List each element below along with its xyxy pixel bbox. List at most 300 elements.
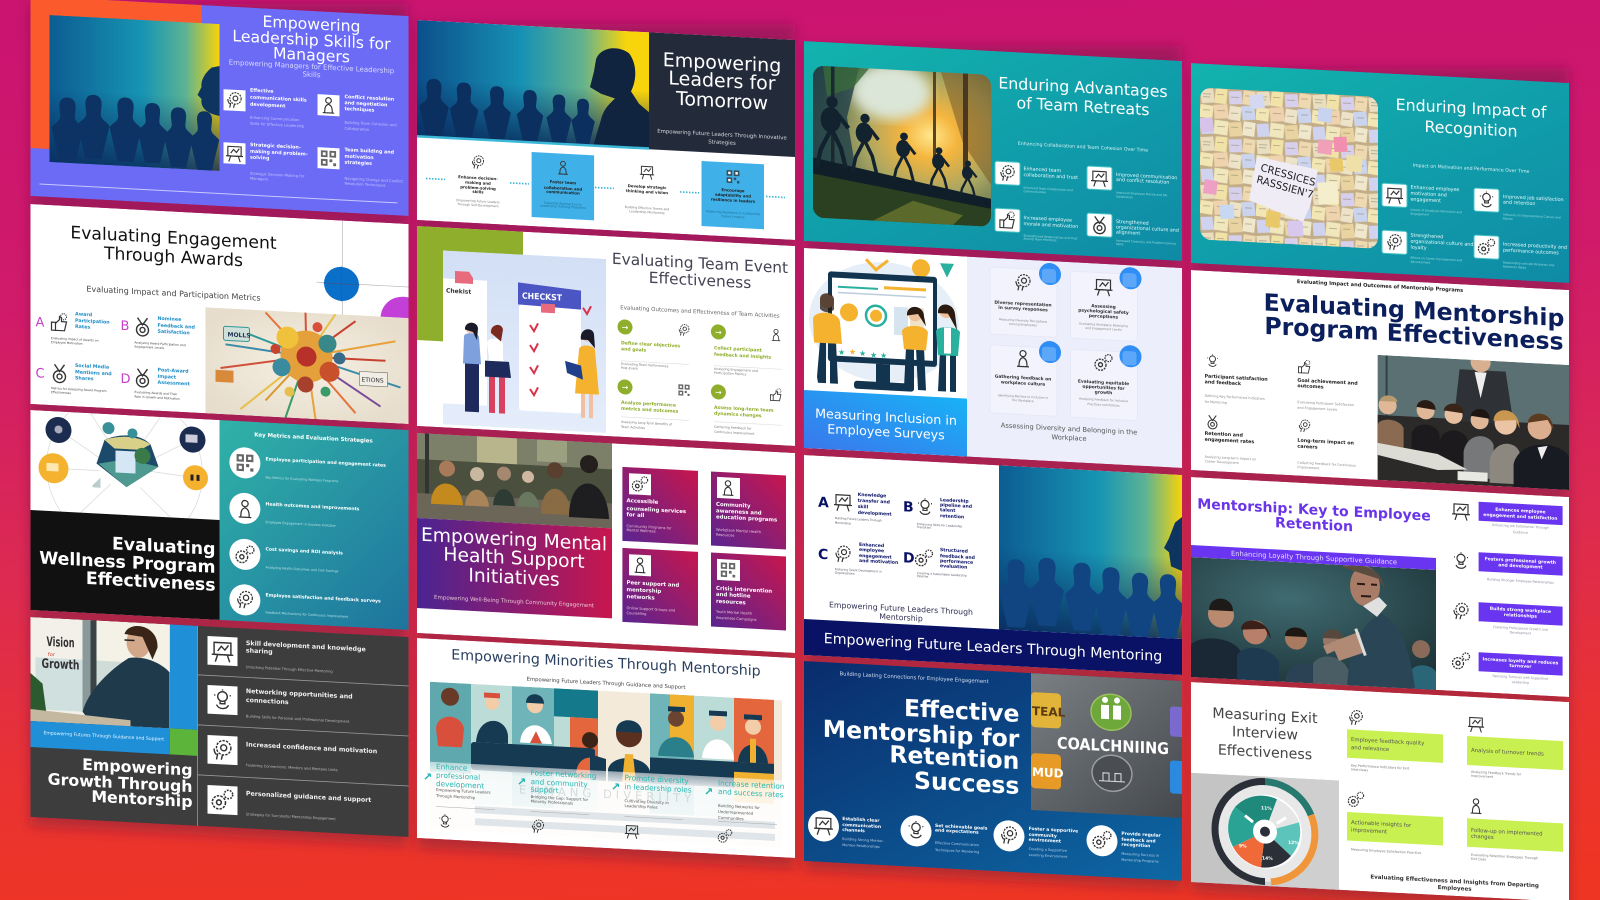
black title panel: Evaluating	[112, 534, 216, 560]
feature grid	[618, 319, 782, 437]
service cards: Awareness Campaigns	[716, 616, 757, 622]
feature grid: motivation	[344, 154, 374, 161]
illustration: diverse leaders	[430, 682, 782, 847]
awards metrics A B C D: Metrics for Assessing Award Program	[51, 386, 107, 393]
subtitle: Empowering Managers for Effective Leadership	[229, 58, 395, 75]
benefit list: Increases loyalty and reduces	[1483, 656, 1559, 666]
service cards: Crisis intervention	[716, 586, 772, 595]
feature grid: and retention	[1503, 200, 1535, 207]
action circles: recognition	[1121, 842, 1150, 849]
feature grid: Strengthened	[1116, 219, 1149, 227]
process cards: Develop strategic	[628, 183, 667, 190]
glass cards: Assessing	[1091, 303, 1116, 310]
feature grid: Define clear objectives	[621, 340, 680, 349]
feature grid: →	[715, 388, 722, 397]
feature grid: Retention Rates	[1503, 265, 1526, 270]
feedback cards: changes	[1471, 834, 1494, 841]
photo: sticky note wall: RASSSIEN'7	[1255, 174, 1315, 201]
teal metrics panel: Analyzing Health Outcomes and Cost Savings	[265, 565, 339, 573]
subtitle: Workplace	[1052, 433, 1086, 443]
feature grid: transfer and	[858, 498, 890, 506]
four goals: Minority Professionals	[531, 799, 573, 806]
title	[1212, 706, 1318, 764]
teal metrics panel: Employee Engagement: A Success Indicator	[265, 520, 336, 528]
four goals: Foster networking	[531, 768, 596, 780]
photo: boardroom meeting	[1378, 355, 1569, 490]
feature grid: and Engagement Levels	[1297, 406, 1337, 412]
blue title panel: Measuring Inclusion in	[815, 406, 957, 428]
awards metrics A B C D: Effectiveness	[51, 390, 71, 395]
feature grid: morale and motivation	[1024, 221, 1078, 230]
gradient title panel	[417, 518, 612, 618]
title: Evaluating Mentorship	[1264, 288, 1564, 332]
feedback cards: and relevance	[1351, 745, 1390, 753]
feature grid: Organizations	[835, 571, 855, 576]
feature grid: Skills	[1116, 242, 1124, 246]
four goals: Communities	[718, 815, 744, 821]
process cards: Enhance decision-	[458, 174, 498, 181]
photo: man at window, Vision for Growth: Vision	[47, 635, 75, 651]
title: Leadership Skills for	[232, 26, 391, 54]
four goals: Leadership Roles	[624, 803, 658, 810]
feature grid: Skills for Effective Leadership	[250, 122, 305, 129]
title: Empowering Minorities Through Mentorship	[451, 647, 761, 680]
service cards: Community Programs for	[626, 524, 672, 530]
watermark: EMMANG DIVERIITY	[519, 782, 695, 806]
title: Effective	[904, 694, 1019, 728]
decorative shapes	[316, 219, 426, 344]
feature grid: careers	[1297, 444, 1318, 451]
gauge image: 12%	[1288, 840, 1299, 846]
feedback cards: Key Performance Indicators for Exit	[1351, 763, 1410, 771]
feature grid: development	[250, 102, 286, 110]
awards metrics A B C D: C	[36, 366, 45, 382]
glass cards: and Engagement Levels	[1085, 326, 1122, 332]
action circles: Set achievable goals	[935, 823, 988, 832]
teal metrics panel: Employee satisfaction and feedback surveys	[265, 592, 381, 605]
title: Recognition	[1425, 117, 1517, 141]
title: Mentorship for	[823, 715, 1020, 753]
feature grid: Structured	[940, 547, 968, 555]
slide: Mentorship: Key to Employee Retention	[1191, 477, 1569, 697]
dark title panel: Empowering Future Leaders Through Innovative	[657, 129, 787, 142]
illustration: checklist and team: Chekist	[446, 288, 471, 296]
title: Effectiveness	[649, 269, 751, 292]
feedback cards: Analysis of turnover trends	[1471, 748, 1544, 758]
glass cards: Diverse representation	[994, 300, 1052, 309]
slide: Measuring Exit Interview Effectiveness	[1191, 682, 1569, 900]
photo: man at window, Vision for Growth	[30, 617, 170, 728]
feature grid: Navigating Change and Conflict	[344, 177, 404, 184]
title: Through Awards	[103, 244, 243, 271]
photo: man pointing, team behind	[1191, 557, 1436, 690]
feature grid: Collecting Feedback for Continuous	[1297, 461, 1356, 468]
awards metrics A B C D: A	[36, 315, 44, 331]
service cards: Peer support and	[626, 580, 679, 589]
four goals: ↗	[517, 775, 526, 789]
process cards: Foster team	[550, 179, 576, 185]
feature grid: →	[622, 383, 629, 392]
process cards: communication	[546, 189, 580, 196]
action circles: Techniques for Mentoring	[934, 848, 979, 854]
photo: coaching chalkboard: TEAL	[1032, 704, 1066, 720]
blue band	[30, 721, 170, 754]
feature grid: B	[903, 499, 914, 516]
subtitle	[829, 600, 973, 626]
illustration: survey dashboard and team: ★	[838, 348, 845, 357]
black title panel	[30, 510, 220, 620]
teal metrics panel: Health outcomes and improvements	[265, 501, 360, 512]
glass cards: workplace culture	[1001, 379, 1045, 388]
feature grid: solving	[250, 155, 270, 162]
benefit list: Reducing Turnover with Supportive	[1493, 674, 1548, 681]
slide: Empowering Leaders for Tomorrow	[417, 20, 795, 240]
title	[1197, 496, 1431, 539]
glass cards: Among Employees	[1009, 322, 1037, 327]
black title panel: Wellness Program	[39, 548, 216, 578]
benefit list: turnover	[1509, 663, 1532, 670]
action circles: Mentee Relationships	[842, 843, 880, 849]
benefit list: Fostering Professional Growth and	[1493, 625, 1548, 632]
subtitle: Mentorship	[879, 612, 923, 623]
title: Evaluating Team Event	[612, 250, 788, 277]
benefit list: and development	[1498, 562, 1543, 571]
awards metrics A B C D: B	[120, 319, 129, 334]
title: Retention	[889, 740, 1019, 775]
photo: coaching chalkboard: MUD	[1032, 765, 1064, 781]
action circles: feedback and	[1121, 837, 1156, 845]
four goals: and success rates	[718, 787, 784, 799]
service cards: Online Support Groups and	[626, 606, 675, 613]
feature grid: Effects on Career Development and	[1410, 256, 1462, 262]
photo: sticky note wall	[1199, 87, 1378, 249]
teal metrics panel: Employee participation and engagement rates	[265, 456, 386, 469]
feature grid: Enhanced Team Collaboration and	[1024, 186, 1073, 192]
purple band	[1191, 545, 1436, 570]
feature grid: Building Future Leaders Through	[835, 516, 882, 523]
four goals: and community	[531, 777, 588, 789]
blue band: Empowering Futures Through Guidance and Support	[44, 730, 164, 743]
feature grid: Leadership	[940, 497, 969, 505]
feature grid: Enhanced employee	[1410, 185, 1459, 193]
feature grid: Building Team Cohesion and	[344, 121, 397, 127]
feature grid: Mentorship	[835, 521, 851, 525]
gauge image: 14%	[1262, 855, 1273, 862]
awards metrics A B C D: Impact	[157, 374, 177, 381]
service cards: Mental Wellness	[626, 528, 656, 534]
awards metrics A B C D: Satisfaction	[157, 329, 190, 336]
feature grid: Gathering Feedback for	[714, 425, 752, 431]
feature grid: performance outcomes	[1503, 248, 1559, 256]
action circles: Measuring Success in	[1121, 852, 1159, 858]
teal metrics panel: Key Metrics and Evaluation Strategies	[254, 432, 373, 445]
gradient title panel: Empowering Mental	[421, 525, 607, 556]
action circles: Building Strong Mentor-	[842, 837, 884, 843]
photo: coaching chalkboard	[1031, 673, 1182, 818]
benefit list: relationships	[1504, 612, 1537, 620]
photo: leader and crowd	[417, 20, 649, 148]
feature grid: and feedback	[1205, 379, 1242, 387]
awards metrics A B C D: Analyzing Award Participation and	[134, 341, 186, 347]
glass cards: growth	[1095, 389, 1112, 396]
process cards: skills	[472, 189, 484, 195]
feedback cards: Employee feedback quality	[1351, 737, 1425, 747]
teal metrics panel: Key Metrics for Evaluating Wellness Programs	[265, 475, 339, 483]
feedback cards: Analyzing Feedback Trends for	[1471, 770, 1522, 776]
illustration: survey dashboard and team: ★	[880, 351, 887, 360]
feature grid: Influence on Organizational Culture and	[1503, 213, 1561, 220]
feature grid: Long-term impact on	[1297, 438, 1355, 447]
illustration: survey dashboard and team	[809, 253, 960, 394]
navy title bar: Empowering Future Leaders Through Mentoring	[824, 631, 1162, 665]
awards metrics A B C D: Social Media	[75, 363, 109, 371]
title: Effectiveness	[1218, 742, 1312, 763]
feature grid: motivation and	[1410, 191, 1447, 199]
feature grid: evaluation	[940, 563, 967, 571]
subtitle: Empowering Future Leaders Through	[829, 600, 973, 617]
four goals: ↗	[423, 770, 432, 784]
glass cards: Analyzing Feedback for Inclusive	[1079, 397, 1128, 403]
feature grid: Team building and	[344, 147, 395, 156]
title	[998, 73, 1168, 120]
feature grid: performance	[940, 558, 973, 566]
service cards: education programs	[716, 514, 777, 524]
dark title panel: Tomorrow	[675, 88, 768, 115]
title: Interview	[1232, 724, 1298, 744]
glass cards: Evaluating Workplace Belonging	[1079, 322, 1128, 328]
four goals: Enhance	[436, 762, 468, 773]
title: Growth Through	[48, 769, 193, 796]
feature grid: Evaluating Participant Satisfaction	[1297, 400, 1354, 407]
eyebrow: Building Lasting Connections for Employee Engagement	[839, 671, 989, 685]
blue title panel: Employee Surveys	[827, 421, 945, 442]
title: Program Effectiveness	[1264, 312, 1564, 356]
feature grid: Assess long-term team	[714, 405, 774, 414]
title: Enduring Impact of	[1396, 95, 1547, 122]
glass cards: opportunities for	[1082, 384, 1125, 392]
feature grid: talent	[940, 507, 956, 514]
feature grid: techniques	[344, 106, 374, 114]
service cards: for all	[626, 512, 645, 519]
service cards: networks	[626, 594, 655, 602]
process cards: Leadership Training Programs	[540, 204, 586, 210]
feature grid: Managers	[250, 177, 268, 182]
feature grid: Fostering Talent Development in	[835, 567, 882, 574]
glass cards: in survey responses	[998, 305, 1048, 313]
feature grid: communication skills	[250, 95, 307, 104]
glass cards	[990, 260, 1142, 421]
feature grid	[995, 161, 1179, 249]
mind map image: MOLLS	[228, 331, 251, 340]
awards metrics A B C D: Feedback and	[157, 323, 196, 331]
feature grid: metrics and outcomes	[621, 406, 679, 415]
benefit list: engagement and satisfaction	[1483, 512, 1557, 522]
action circles: Mentorship Programs	[1121, 858, 1159, 864]
awards metrics A B C D: D	[120, 372, 131, 387]
feature grid: Analyzing Engagement and	[714, 367, 758, 373]
bottom caption	[1370, 874, 1539, 896]
action circles: Effective Communication	[935, 841, 979, 847]
awards metrics A B C D: Post-Award	[157, 367, 189, 375]
photo: man at window, Vision for Growth: Growth	[42, 657, 80, 674]
feature grid: and goals	[621, 346, 646, 354]
feature grid: engagement	[859, 553, 892, 561]
benefit rows: Strategies for Successful Mentorship Engagement	[246, 812, 336, 821]
feature grid: and conflict resolution	[1116, 177, 1169, 186]
feedback cards: Exit Data	[1471, 857, 1486, 862]
subtitle: Evaluating Impact and Participation Metrics	[86, 284, 261, 303]
feature grid: Improved Employee Morale and Job	[1116, 191, 1168, 197]
glass cards: Measuring Diversity Perceptions	[999, 317, 1048, 324]
feature grid: Increased productivity and	[1503, 242, 1567, 251]
photo: sticky note wall: CRESSICES	[1259, 162, 1317, 189]
feature grid: feedback and insights	[714, 352, 771, 361]
title: of Team Retreats	[1016, 93, 1150, 119]
purple band: Enhancing Loyalty Through Supportive Guidance	[1231, 550, 1397, 566]
service cards: resources	[716, 599, 746, 606]
photo: coaching chalkboard: COALCHNIING	[1057, 733, 1169, 758]
benefit list: Enhances employee	[1495, 507, 1546, 515]
awards metrics A B C D: Assessment	[157, 380, 191, 387]
four goals: professional	[436, 771, 480, 782]
glass cards: Gathering feedback on	[995, 374, 1051, 383]
four goals: Building Networks for	[718, 803, 760, 810]
awards metrics A B C D: Mentions and	[75, 369, 112, 377]
blue title panel	[804, 390, 967, 457]
action circles	[808, 810, 1162, 864]
gradient title panel: Empowering Well-Being Through Community Engagement	[434, 595, 595, 609]
feature grid: Strategic decision-	[250, 142, 301, 151]
feedback cards: Actionable insights for	[1351, 820, 1412, 829]
slide: Empowering Mental Health Support Initiatives	[417, 433, 795, 653]
photo: crowd and leader silhouette	[50, 15, 220, 171]
dark title panel	[649, 32, 795, 157]
title: Enduring Advantages	[998, 73, 1168, 101]
service cards: Counseling	[626, 611, 646, 616]
process cards: resilience in leaders	[711, 197, 756, 204]
feature grid: →	[715, 328, 722, 337]
awards metrics A B C D: Role in Growth and Motivation	[134, 395, 180, 401]
feature grid: Strategic Decision-Making for	[250, 172, 305, 179]
four goals: Bridging the Gap: Support for	[531, 794, 589, 802]
feature grid: alignment	[1116, 230, 1140, 237]
title	[48, 753, 193, 811]
feature grid: Retention and	[1205, 431, 1243, 439]
feature grid	[1382, 183, 1567, 272]
illustration: survey dashboard and team: ★	[870, 350, 877, 360]
title	[70, 223, 277, 273]
benefit list: Development	[1510, 630, 1532, 636]
process cards: Empowering Future Leaders	[456, 198, 500, 204]
dark title panel: Leaders for	[668, 67, 776, 95]
title: Retention	[1275, 515, 1353, 535]
feature grid: Satisfaction	[1116, 195, 1133, 199]
feature grid: making and problem-	[250, 149, 308, 158]
action circles: Learning Environment	[1029, 853, 1068, 859]
feature grid: Career Development	[1205, 459, 1240, 465]
feedback cards: Follow-up on implemented	[1471, 828, 1543, 838]
title: Empowering	[82, 755, 193, 780]
feature grid: Morale	[1503, 217, 1513, 221]
slide: Empowering Future Leaders Through Mentoring	[804, 455, 1184, 675]
slide: Evaluating Team Event Effectiveness	[417, 226, 795, 446]
feature grid	[818, 490, 975, 582]
slide: Evaluating Engagement Through Awards	[30, 204, 426, 425]
benefit rows: Building Skills for Personal and Professional Development	[246, 714, 350, 724]
awards metrics A B C D: Evaluating Awards and Their	[134, 390, 178, 396]
action circles: communication	[842, 822, 881, 830]
navy title bar	[804, 619, 1182, 675]
service cards: Workplace Mental Health	[716, 528, 761, 534]
title: Measuring Exit	[1212, 706, 1318, 727]
mind map image: ETIONS	[361, 377, 384, 385]
feature grid: organizational culture and	[1410, 239, 1473, 248]
glass cards: Practices and Policies	[1087, 402, 1120, 408]
bottom caption: Employees	[1438, 885, 1472, 893]
illustration: survey dashboard and team: ★	[849, 347, 856, 357]
title: Empowering	[263, 12, 360, 36]
awards metrics A B C D: Employee Motivation	[51, 340, 83, 346]
glass cards: the Workplace	[1012, 398, 1034, 403]
feature grid: Pipeline	[917, 574, 929, 579]
awards metrics A B C D: Award	[75, 311, 93, 318]
benefit list: Building Stronger Employee Relationships	[1487, 577, 1554, 585]
service cards	[622, 467, 786, 631]
subtitle	[1001, 421, 1137, 446]
feedback cards: improvement	[1351, 827, 1387, 835]
feature grid: Relationship with Job Retention and	[1503, 261, 1555, 267]
four goals: Cultivating Diversity in	[624, 798, 669, 805]
four goals: in leadership roles	[624, 782, 692, 795]
gauge image: 9%	[1239, 843, 1247, 850]
feature grid: and negotiation	[344, 100, 388, 108]
benefit rows	[198, 626, 408, 837]
four goals: Promote diversity	[624, 773, 689, 785]
benefit rows: Increased confidence and motivation	[246, 741, 377, 755]
process cards: making and	[465, 180, 491, 186]
photo: crowd and leader silhouette	[999, 466, 1182, 639]
feature grid: Conflict resolution	[344, 94, 395, 103]
awards metrics A B C D	[36, 309, 196, 402]
illustration: survey dashboard and team: ★	[859, 349, 866, 358]
feature grid: retention	[940, 513, 964, 520]
feedback cards: Measuring Employee Satisfaction Post-Exit	[1351, 847, 1422, 855]
slide: Empowering Leadership Skills for Managers	[30, 0, 408, 216]
awards metrics A B C D: Engagement Levels	[134, 345, 164, 350]
feedback cards: Improvement	[1471, 774, 1494, 779]
benefit list: Leadership	[1512, 680, 1529, 685]
process cards	[426, 146, 785, 230]
feature grid: Participation Metrics	[714, 371, 747, 376]
subtitle: Enhancing Collaboration and Team Cohesion Over Time	[1018, 141, 1148, 154]
feature grid: Impact of Employee Motivation and	[1410, 208, 1462, 214]
benefit rows: connections	[246, 697, 289, 706]
benefit rows: Unlocking Potential Through Effective Mentoring	[246, 665, 333, 674]
title	[1264, 288, 1564, 356]
feature grid: Improved job satisfaction	[1503, 194, 1564, 203]
feature grid: pipeline and	[940, 502, 972, 510]
feature grid	[224, 86, 404, 189]
service cards: Youth Mental Health	[716, 610, 752, 616]
teal metrics panel: Cost savings and ROI analysis	[265, 546, 343, 557]
four goals: support	[531, 785, 559, 795]
glass cards: perceptions	[1089, 313, 1119, 321]
benefit rows: Fostering Connections: Mentors and Mentees Unite	[246, 763, 339, 772]
benefit list: Enhancing Job Satisfaction Through	[1492, 523, 1549, 530]
feature grid: feedback and	[940, 553, 975, 561]
feature grid: Evaluating Team Performance	[621, 362, 669, 368]
gradient title panel: Health Support	[443, 544, 585, 573]
